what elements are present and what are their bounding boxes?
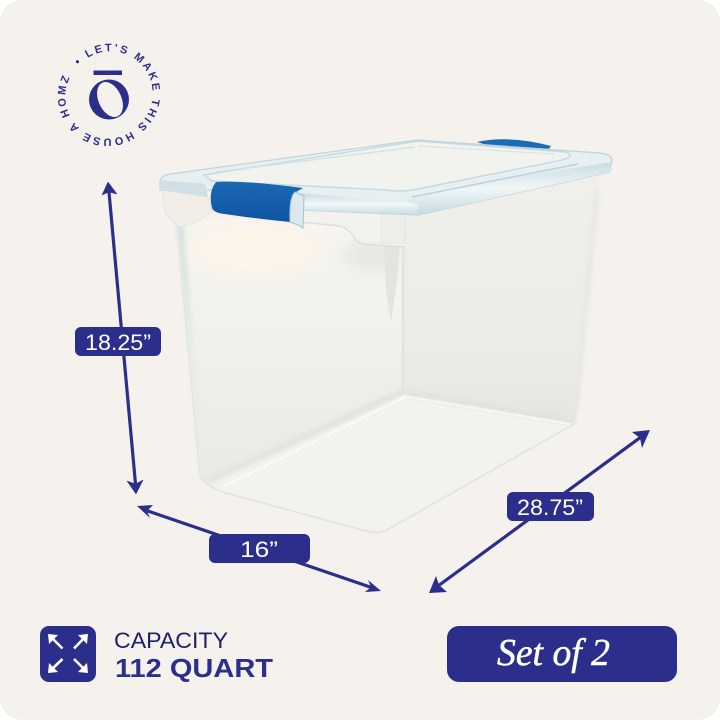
bin left wall xyxy=(177,215,403,492)
right edge shading xyxy=(573,190,600,412)
floor seams xyxy=(177,225,574,532)
height label: 18.25” xyxy=(85,330,151,355)
left edge shading xyxy=(177,222,205,477)
corner fin xyxy=(384,246,400,322)
front latch moulding xyxy=(298,205,405,246)
height label xyxy=(75,327,161,356)
width arrow xyxy=(137,505,381,592)
depth label xyxy=(507,492,594,521)
brand badge xyxy=(58,44,160,146)
bin floor xyxy=(205,390,574,532)
set of 2 badge xyxy=(447,626,677,682)
capacity text: CAPACITY xyxy=(114,628,228,653)
grey reflection xyxy=(342,242,398,270)
warm reflection xyxy=(193,228,317,272)
lid front rim left xyxy=(300,193,418,215)
logo ring xyxy=(89,78,129,121)
depth label: 28.75” xyxy=(517,495,583,520)
lid left corner xyxy=(160,180,208,197)
height arrow xyxy=(102,182,143,494)
width label: 16” xyxy=(240,537,278,562)
handle clip xyxy=(290,192,304,228)
set of 2 badge: Set of 2 xyxy=(497,632,610,674)
bin right wall xyxy=(403,175,600,423)
icon: capacity expand arrows xyxy=(40,626,96,682)
capacity text: 112 QUART xyxy=(115,655,273,683)
logo bar xyxy=(94,70,122,75)
front handle xyxy=(211,182,303,222)
lid top panel xyxy=(204,141,570,191)
back handle xyxy=(477,139,551,150)
left tab xyxy=(162,190,212,226)
depth arrow xyxy=(429,430,650,593)
lid outer xyxy=(160,140,612,215)
lid front rim right xyxy=(405,162,612,215)
product photo: storage bin xyxy=(160,139,612,532)
circular slogan: • LET'S MAKE THIS HOUSE A HOMZ xyxy=(58,44,160,146)
width label xyxy=(209,534,310,563)
capacity text xyxy=(114,628,273,683)
